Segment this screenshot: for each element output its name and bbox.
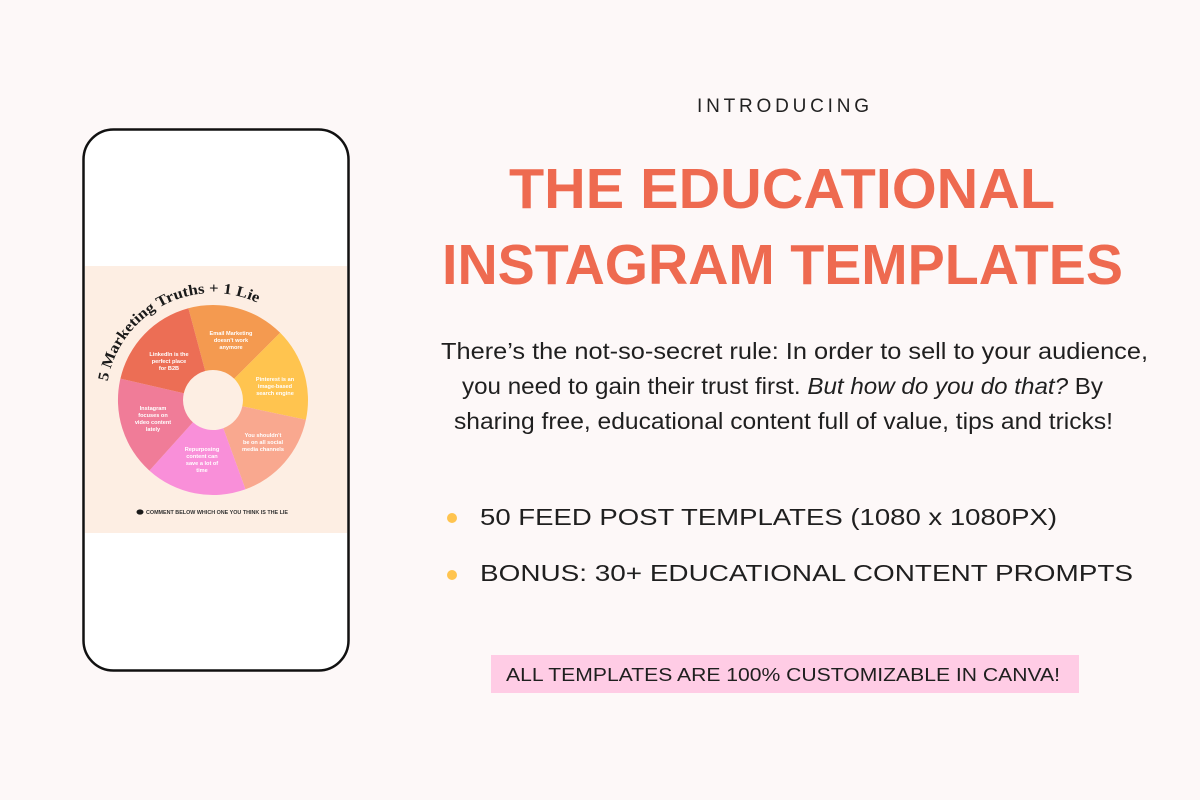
donut chart: focuses on <box>138 413 168 419</box>
banner: ALL TEMPLATES ARE 100% CUSTOMIZABLE IN CANVA! <box>506 665 1060 685</box>
body text: There’s the not-so-secret rule: In order to sell to your audience, <box>441 338 1148 364</box>
donut chart: video content <box>135 420 171 426</box>
donut chart: perfect place <box>152 359 186 365</box>
donut chart: time <box>196 468 208 474</box>
phone mockup <box>82 128 350 672</box>
body text: sharing free, educational content full of value, tips and tricks! <box>454 408 1113 434</box>
body text: you need to gain their trust first. But how do you do that? By <box>462 373 1104 399</box>
donut chart: Instagram <box>140 406 166 412</box>
donut chart: content can <box>186 454 218 460</box>
donut chart: LinkedIn is the <box>149 352 189 358</box>
curved title: 5 Marketing Truths + 1 Lie <box>98 284 259 381</box>
banner <box>491 655 1079 693</box>
donut chart: doesn't work <box>214 338 249 344</box>
donut chart: search engine <box>256 391 294 397</box>
bullet 2: BONUS: 30+ EDUCATIONAL CONTENT PROMPTS <box>480 560 1133 586</box>
main title <box>442 157 1123 297</box>
main title: THE EDUCATIONAL <box>509 157 1055 221</box>
post: marketing truths graphic <box>85 266 347 533</box>
donut chart <box>118 305 308 495</box>
donut chart: image-based <box>258 384 293 390</box>
donut chart: You shouldn't <box>245 433 281 439</box>
comment line: COMMENT BELOW WHICH ONE YOU THINK IS THE LIE <box>146 510 288 516</box>
bullet list <box>447 504 1133 586</box>
donut chart: media channels <box>242 447 284 453</box>
donut chart: Repurposing <box>185 447 220 453</box>
donut chart: for B2B <box>159 366 179 372</box>
donut chart: Pinterest is an <box>256 377 295 383</box>
introducing label: INTRODUCING <box>697 96 869 117</box>
donut chart: save a lot of <box>186 461 218 467</box>
donut chart: Email Marketing <box>210 331 253 337</box>
donut chart: lately <box>146 427 161 433</box>
body text <box>441 338 1148 434</box>
donut chart: anymore <box>219 345 243 351</box>
donut chart: be on all social <box>243 440 283 446</box>
main title: INSTAGRAM TEMPLATES <box>442 233 1123 297</box>
bullet 1: 50 FEED POST TEMPLATES (1080 x 1080PX) <box>480 504 1057 530</box>
